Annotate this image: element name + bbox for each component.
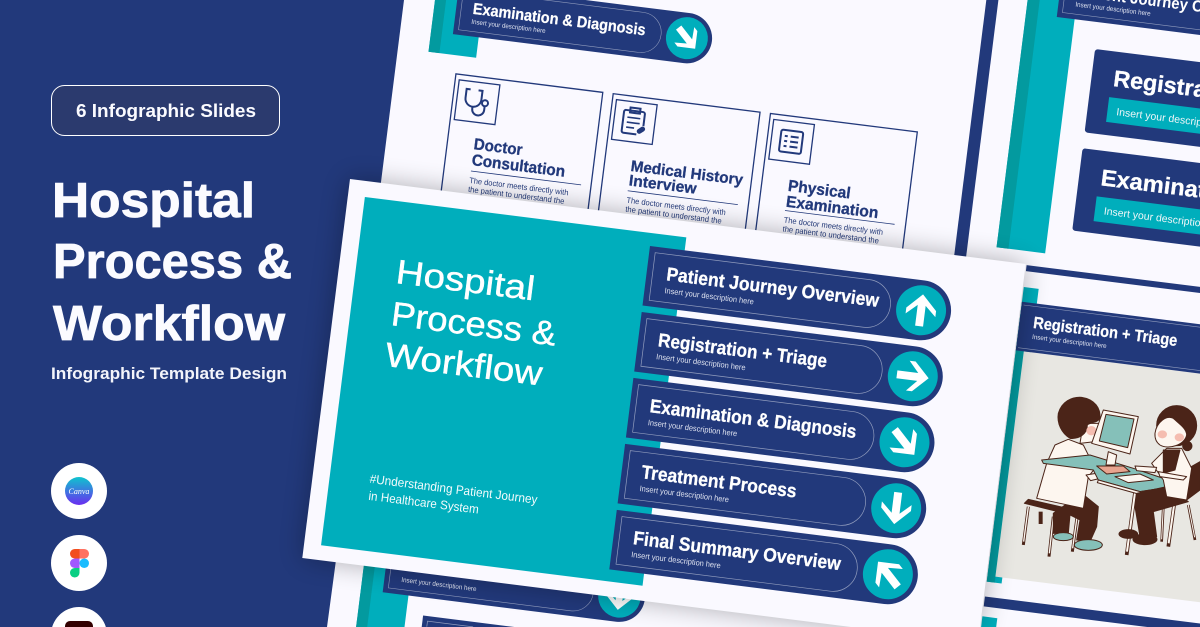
doctor [1119,406,1200,545]
pill: Examination & Diagnosis: Examination & Diagnosis [472,1,647,39]
icon: Canva: Canva [69,487,89,496]
pill: Patient Journey Overview (cropped): Insert your description here [1075,1,1151,18]
desk [1042,455,1183,555]
panel: registration slide teal strip [987,287,1039,583]
papers [1097,466,1153,483]
left column: badge: 6 Infographic Slides [76,100,256,121]
card: Physical Examination: Examination [785,194,879,222]
navy frame strip top [1026,265,1200,293]
pill: Patient Journey Overview: Patient Journey Overview [665,264,880,312]
arrow: up left [866,552,910,596]
main slide content [321,197,956,620]
card: Medical History Interview [596,94,760,251]
pill: Examination & Diagnosis [453,0,715,66]
navy frame strip [953,0,1016,266]
card: Physical Examination: The doctor meets directly with [783,215,884,237]
panel: teal cover [321,197,686,586]
left column: badge [52,86,280,136]
panel: registration slide image area [995,351,1200,602]
pill: Examination & Diagnosis: Insert your description here [647,418,738,438]
main title: Process & [389,295,559,354]
pill: Final Summary Overview: Insert your description here [631,550,722,570]
icon: Canva [51,463,107,519]
pill: Treatment Process (mostly hidden): Insert your description here [401,577,477,593]
pill: Treatment Process [618,444,930,542]
card: Doctor Consultation: Doctor [473,136,523,159]
pill: Patient Journey Overview [642,246,955,344]
card: Doctor Consultation [438,74,603,231]
pill: Examination & Diagnosis: Insert your description here [471,19,546,35]
back slides sheet [327,0,1200,627]
left column: title: Workflow [53,297,286,351]
pill: Patient Journey Overview (cropped) [1057,0,1200,50]
pill: Treatment Process: Insert your description here [639,484,730,504]
panel: treatment slide teal tab [356,524,417,627]
pill: Patient Journey Overview: Insert your description here [664,286,755,306]
tagline: in Healthcare System [368,489,480,517]
left column: subtitle: Infographic Template Design [51,364,287,383]
card: Physical Examination: Physical [787,178,852,203]
stool [1023,499,1082,557]
pill: Registration + Triage [634,312,946,410]
main slide shadow [303,179,1026,627]
panel: examination slide teal tab [428,0,497,58]
icon: stethoscope [464,89,489,117]
card: Examination & Diagnosis [1072,148,1200,270]
icon: clipboard [621,107,649,136]
main title: Hospital [394,253,537,308]
pill: Treatment Process: Treatment Process [640,462,798,503]
left column: title: Process & [53,235,292,289]
main slide sheet [302,179,1026,627]
left column: title [52,174,292,351]
pill: lower slide bar [422,616,514,627]
main title [383,253,564,395]
card: Physical Examination [753,113,917,271]
card: Doctor Consultation: Consultation [471,152,566,181]
patient [1037,397,1107,550]
header: Registration + Triage: Insert your description here [1032,334,1107,350]
icon: third app [51,607,107,627]
header: Registration + Triage [1016,302,1200,374]
header: Registration + Triage: Registration + Triage [1032,314,1178,350]
card: Medical History Interview: Interview [628,172,698,198]
teal tab next slide [981,616,997,627]
card: Medical History Interview: Medical History [630,158,744,189]
monitor [1092,410,1138,465]
icon: checklist [779,129,803,154]
pill: Final Summary Overview [609,510,921,608]
tagline [367,472,539,524]
pill: Final Summary Overview: Final Summary Overview [632,528,842,575]
card: Registration + Triage [1085,49,1200,172]
card: Doctor Consultation: the patient to understand the [468,185,565,206]
pill: Treatment Process (mostly hidden) [383,542,648,625]
left column: title: Hospital [52,174,255,228]
arrow: right [895,359,931,393]
arrow: down right [883,420,926,464]
main title: Workflow [383,336,545,393]
card: Physical Examination: the patient to understand the [782,224,880,246]
panel: overview slide teal strip [997,0,1093,253]
pill: Examination & Diagnosis [626,378,938,476]
pill: Registration + Triage: Insert your description here [656,352,747,372]
arrow: down [879,490,913,526]
pill: Examination & Diagnosis: Examination & Diagnosis [649,396,858,443]
tagline: #Understanding Patient Journey [369,472,539,507]
card: Doctor Consultation: The doctor meets directly with [469,176,569,197]
pill: Registration + Triage: Registration + Triage [657,330,828,372]
navy frame strip bottom [984,596,1200,627]
card: Medical History Interview: The doctor meets directly with [626,196,726,217]
card: Medical History Interview: the patient to understand the [625,205,723,226]
illustration: doctor and patient at a desk [1023,397,1200,557]
arrow: up [904,293,938,328]
icon: Figma [51,535,107,591]
